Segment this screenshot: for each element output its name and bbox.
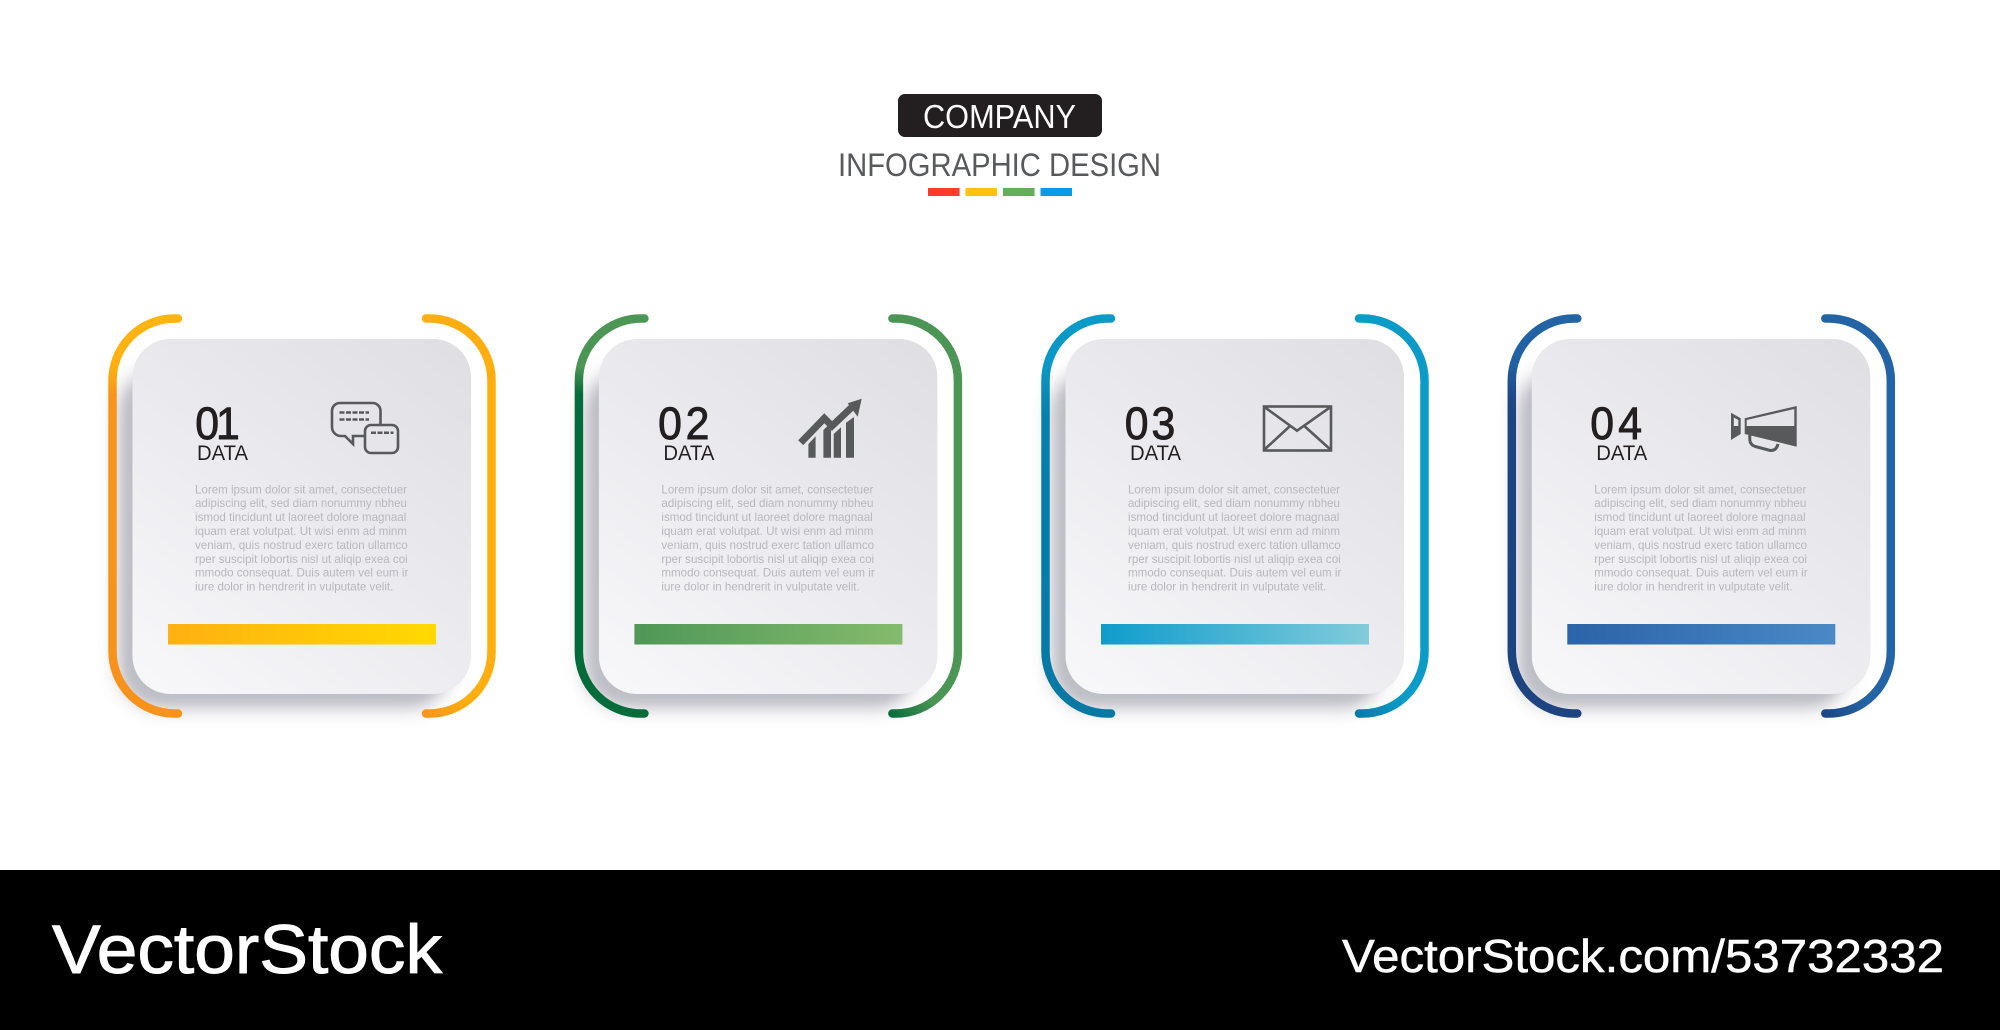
body text <box>661 483 875 594</box>
body text: mmodo consequat. Duis autem vel eum ir <box>1128 567 1341 580</box>
colour bar <box>634 624 902 644</box>
body text: rper suscipit lobortis nisl ut aliqip exea coi <box>661 553 874 566</box>
label: DATA <box>1596 441 1648 465</box>
card shadow <box>582 368 918 710</box>
body text: Lorem ipsum dolor sit amet, consectetuer <box>1594 483 1806 496</box>
body text: Lorem ipsum dolor sit amet, consectetuer <box>195 483 407 496</box>
body text: iure dolor in hendrerit in vulputate velit. <box>195 581 393 594</box>
colour key bars <box>928 188 1072 196</box>
card shadow <box>116 368 452 710</box>
panel: card 01 <box>112 318 492 714</box>
company pill: COMPANY <box>923 98 1076 135</box>
header <box>838 94 1161 196</box>
body text: mmodo consequat. Duis autem vel eum ir <box>661 567 875 580</box>
body text: iquam erat volutpat. Ut wisi enm ad minm <box>661 525 873 538</box>
label: DATA <box>1130 441 1182 465</box>
bracket left <box>112 318 178 714</box>
body text: rper suscipit lobortis nisl ut aliqip exea coi <box>1594 553 1807 566</box>
body text <box>1594 483 1808 594</box>
bracket left <box>579 318 644 714</box>
body text: adipiscing elit, sed diam nonummy nbheu <box>661 497 873 510</box>
label: DATA <box>663 441 715 465</box>
body text: iquam erat volutpat. Ut wisi enm ad minm <box>1594 525 1806 538</box>
body text <box>1128 483 1341 594</box>
bracket right <box>426 318 492 714</box>
card body <box>1532 339 1870 694</box>
body text: ismod tincidunt ut laoreet dolore magnaal <box>1594 511 1806 524</box>
company pill <box>898 94 1102 137</box>
body text: Lorem ipsum dolor sit amet, consectetuer <box>1128 483 1340 496</box>
body text: mmodo consequat. Duis autem vel eum ir <box>195 567 408 580</box>
body text: ismod tincidunt ut laoreet dolore magnaal <box>1128 511 1339 524</box>
body text: ismod tincidunt ut laoreet dolore magnaal <box>661 511 873 524</box>
body text: veniam, quis nostrud exerc tation ullamco <box>1128 539 1341 552</box>
body text: iquam erat volutpat. Ut wisi enm ad minm <box>1128 525 1340 538</box>
bracket left <box>1512 318 1577 714</box>
body text: adipiscing elit, sed diam nonummy nbheu <box>1128 497 1340 510</box>
body text: veniam, quis nostrud exerc tation ullamco <box>195 539 408 552</box>
icon: envelope <box>1264 406 1331 450</box>
brand wordmark: VectorStock <box>52 911 443 988</box>
label: DATA <box>197 441 249 465</box>
icon: megaphone <box>1731 406 1797 451</box>
card shadow <box>1515 368 1851 710</box>
bracket right <box>892 318 958 714</box>
body text: iure dolor in hendrerit in vulputate velit. <box>661 581 860 594</box>
image url: VectorStock.com/53732332 <box>1342 930 1944 982</box>
colour bar <box>168 624 436 644</box>
body text: iquam erat volutpat. Ut wisi enm ad minm <box>195 525 407 538</box>
body text: iure dolor in hendrerit in vulputate velit. <box>1128 581 1326 594</box>
card shadow <box>1049 368 1385 710</box>
number: 04 <box>1590 399 1642 449</box>
body text: adipiscing elit, sed diam nonummy nbheu <box>1594 497 1806 510</box>
body text: ismod tincidunt ut laoreet dolore magnaal <box>195 511 406 524</box>
body text: rper suscipit lobortis nisl ut aliqip exea coi <box>195 553 408 566</box>
card body <box>132 339 471 694</box>
colour bar <box>1101 624 1369 644</box>
body text <box>195 483 408 594</box>
title: infographic design: INFOGRAPHIC DESIGN <box>838 147 1161 183</box>
footer band <box>0 870 2000 1030</box>
card body <box>599 339 937 694</box>
body text: veniam, quis nostrud exerc tation ullamco <box>1594 539 1807 552</box>
icon: chat bubbles <box>332 403 398 453</box>
bracket right <box>1359 318 1425 714</box>
body text: mmodo consequat. Duis autem vel eum ir <box>1594 567 1808 580</box>
icon: rising bar chart with arrow <box>801 399 862 458</box>
body text: rper suscipit lobortis nisl ut aliqip exea coi <box>1128 553 1341 566</box>
body text: Lorem ipsum dolor sit amet, consectetuer <box>661 483 873 496</box>
card body <box>1066 339 1404 694</box>
panel: card 03 <box>1045 318 1425 714</box>
body text: iure dolor in hendrerit in vulputate velit. <box>1594 581 1793 594</box>
panel: card 02 <box>579 318 958 714</box>
panel: card 04 <box>1512 318 1891 714</box>
body text: veniam, quis nostrud exerc tation ullamco <box>661 539 875 552</box>
bracket left <box>1045 318 1111 714</box>
number: 01 <box>195 399 240 449</box>
bracket right <box>1825 318 1891 714</box>
number: 02 <box>658 399 709 449</box>
body text: adipiscing elit, sed diam nonummy nbheu <box>195 497 407 510</box>
number: 03 <box>1125 399 1175 449</box>
colour bar <box>1567 624 1835 644</box>
